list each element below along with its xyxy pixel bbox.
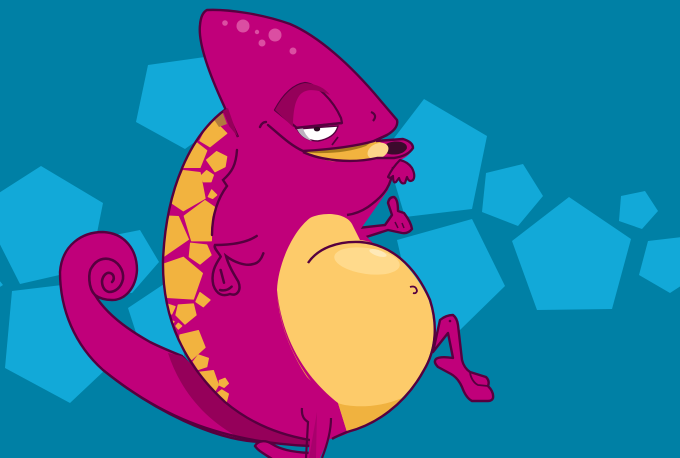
back foot [255,441,312,458]
mouth lines [260,122,387,151]
chin fingers [388,160,414,183]
far leg [433,315,493,401]
tail spiral [89,259,123,295]
thumb-up arm [358,197,412,239]
belly [277,214,435,439]
scale tip shadow [214,113,227,127]
head shadow [223,108,238,137]
body [157,109,435,458]
belly highlight [333,244,401,278]
nostril [371,112,375,121]
belly button [410,286,417,293]
front leg [302,408,332,458]
left arm and hand [213,236,263,295]
mouth interior [382,140,408,156]
tongue [303,141,388,162]
back scales [164,113,229,402]
back outline [163,109,310,440]
tail [60,232,310,446]
head spots [222,20,296,54]
side contour [212,150,237,235]
eye [275,83,342,145]
background pentagons [0,57,680,403]
tail shadow [168,353,310,445]
head [200,10,414,215]
